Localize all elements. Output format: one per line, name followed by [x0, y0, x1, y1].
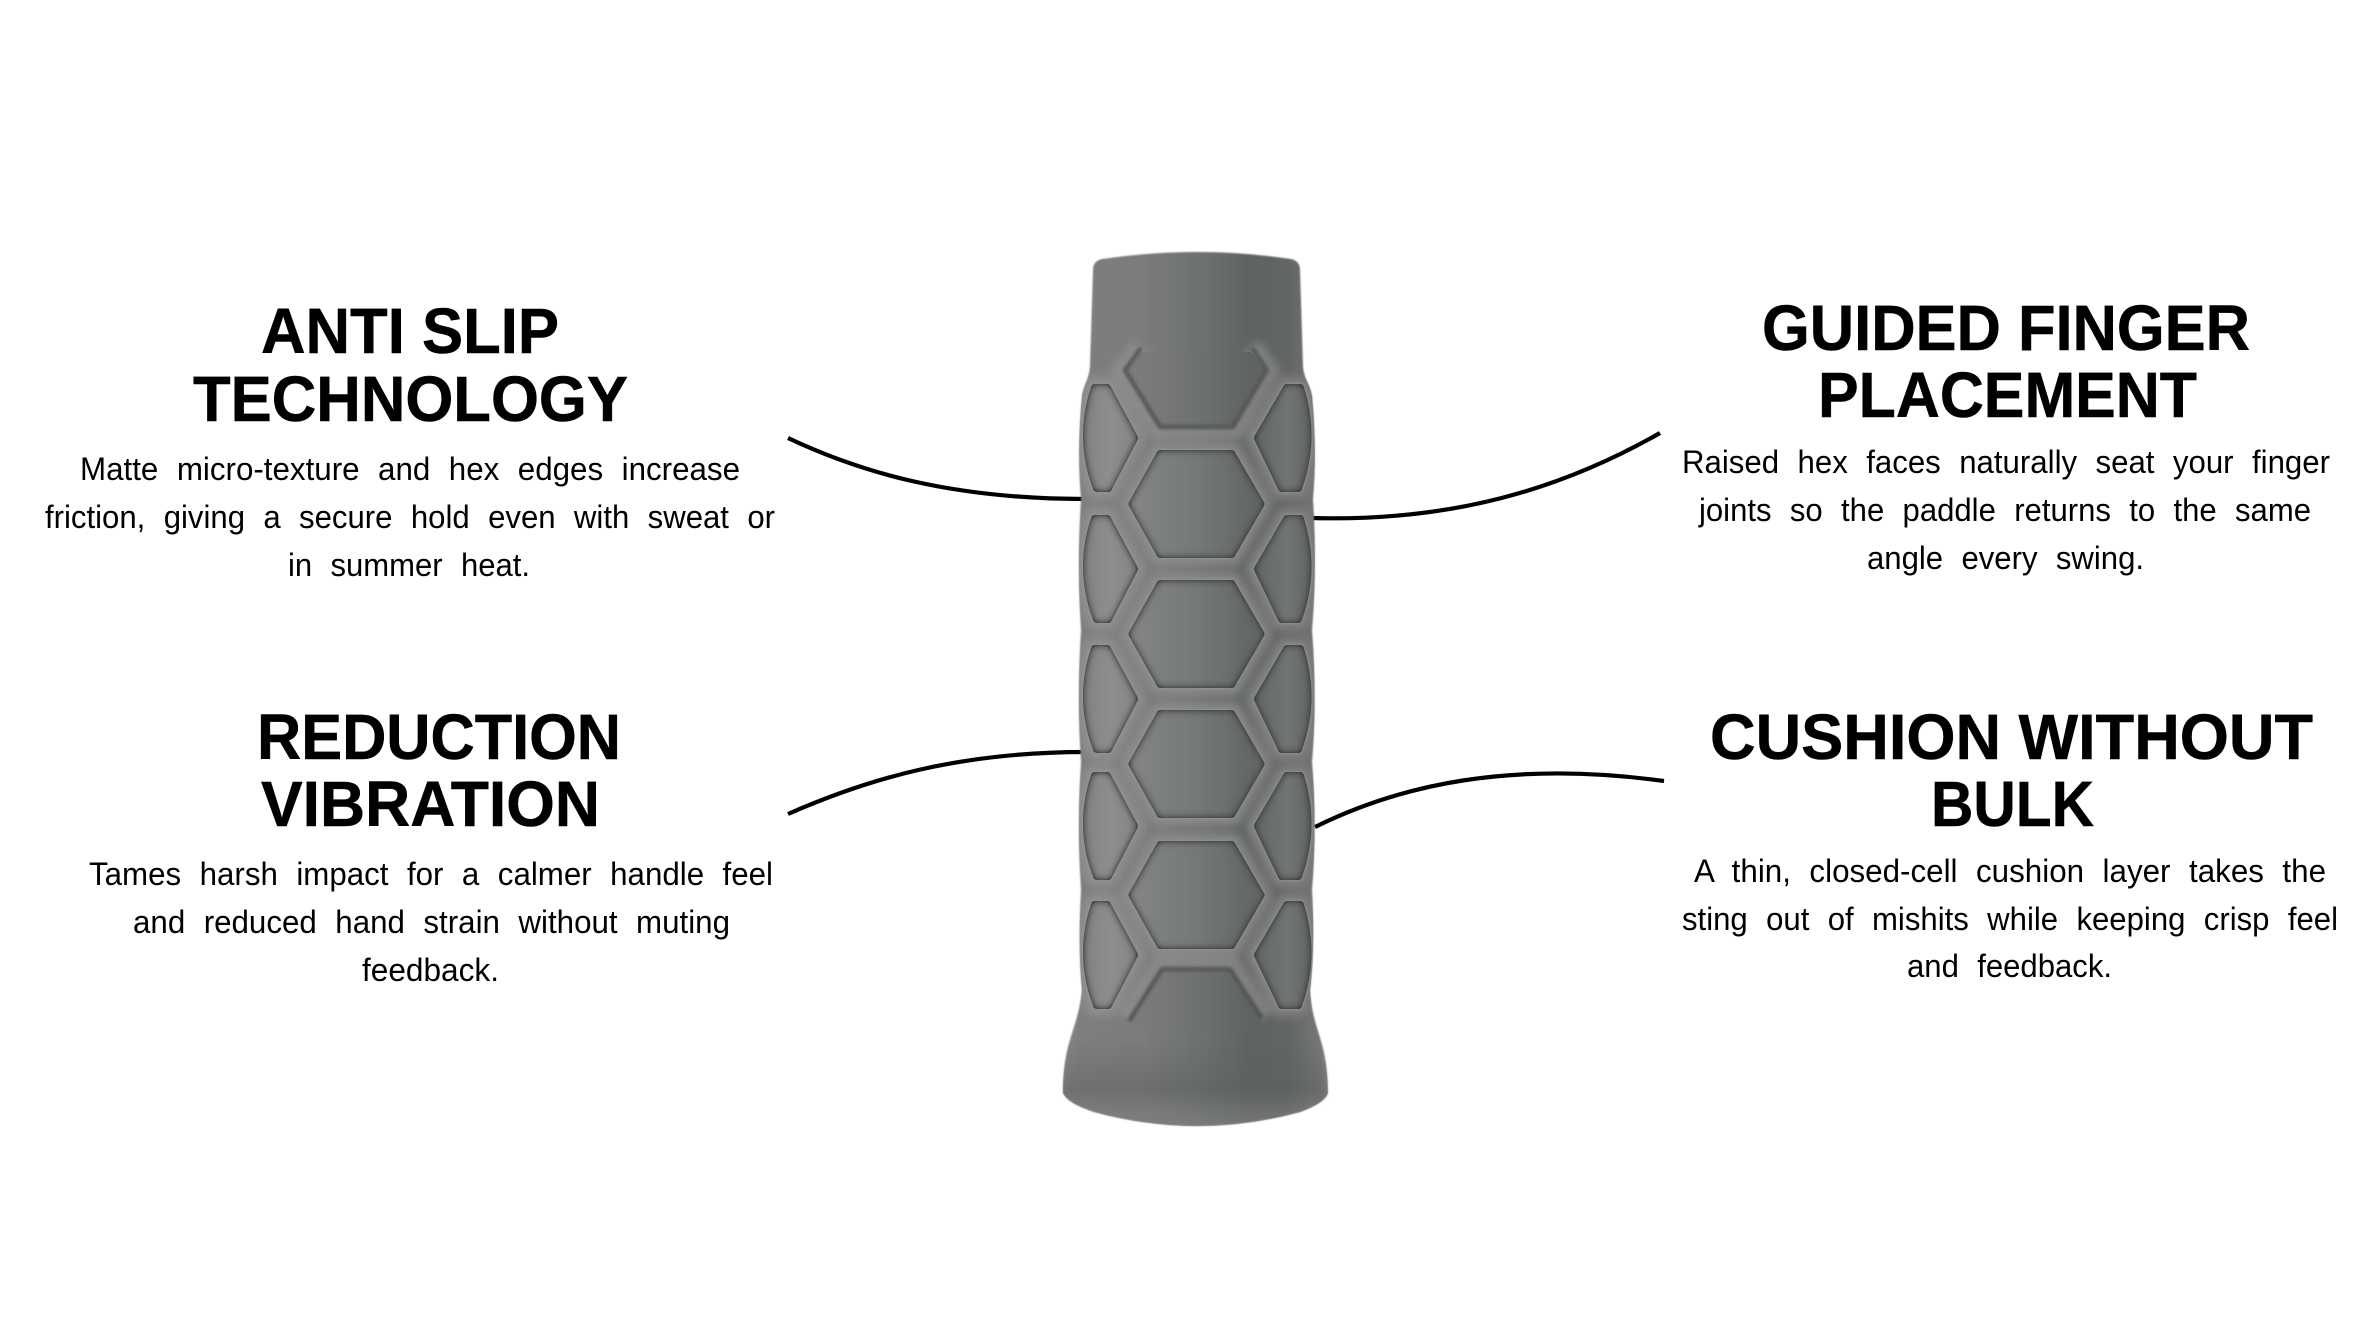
body copy: Tames harsh impact for a calmer handle feel	[89, 856, 773, 892]
heading: ANTI SLIP	[261, 295, 559, 367]
partial hexagon edges	[1125, 348, 1267, 1021]
body copy: Raised hex faces naturally seat your finger	[1682, 444, 2330, 480]
body copy: and reduced hand strain without muting	[133, 904, 730, 940]
raised rib lattice	[1087, 347, 1308, 1030]
right side cell 3	[1258, 649, 1308, 749]
hexagon 4	[1132, 845, 1260, 945]
hexagon 1	[1132, 454, 1260, 554]
body copy	[1682, 853, 2338, 984]
infographic canvas	[45, 251, 2336, 1127]
callout line: reduction vibration	[788, 752, 1086, 814]
right side cell 4	[1258, 776, 1308, 876]
recessed cells	[1087, 388, 1308, 1005]
partial hexagon top	[1126, 352, 1266, 426]
left side cell 5	[1087, 905, 1134, 1005]
text block: cushion without bulk	[1682, 701, 2338, 984]
hexagon 2	[1132, 584, 1260, 684]
heading	[1710, 701, 2313, 840]
handle grip illustration	[1060, 252, 1330, 1140]
heading: GUIDED FINGER	[1762, 292, 2250, 364]
heading	[1762, 292, 2250, 431]
base shading	[1063, 1052, 1328, 1126]
heading: TECHNOLOGY	[193, 363, 628, 435]
body copy: friction, giving a secure hold even with sweat or	[45, 499, 775, 535]
body copy: sting out of mishits while keeping crisp feel	[1682, 901, 2338, 937]
heading: PLACEMENT	[1818, 359, 2197, 431]
body copy	[45, 451, 775, 583]
body copy	[1682, 444, 2330, 576]
right side cell 5	[1258, 905, 1308, 1005]
body copy: Matte micro-texture and hex edges increase	[80, 451, 740, 487]
callout line: cushion without bulk	[1315, 773, 1664, 827]
body copy: feedback.	[362, 952, 499, 988]
left side cell 3	[1087, 649, 1134, 749]
heading: BULK	[1931, 768, 2094, 840]
text block: reduction vibration	[89, 701, 773, 988]
body copy: angle every swing.	[1867, 540, 2144, 576]
grip body silhouette	[1063, 252, 1328, 1126]
left side cell 1	[1087, 388, 1134, 488]
heading: CUSHION WITHOUT	[1710, 701, 2313, 773]
body copy	[89, 856, 773, 988]
text block: anti slip technology	[45, 295, 775, 583]
heading: VIBRATION	[261, 768, 600, 840]
hexagon 3	[1132, 714, 1260, 814]
body copy: joints so the paddle returns to the same	[1698, 492, 2311, 528]
left side cell 4	[1087, 776, 1134, 876]
body copy: in summer heat.	[288, 547, 530, 583]
partial hexagon bottom	[1132, 970, 1261, 1024]
right side cell 2	[1258, 519, 1308, 619]
heading	[193, 295, 628, 435]
body copy: and feedback.	[1907, 948, 2112, 984]
heading: REDUCTION	[257, 701, 621, 773]
heading	[257, 701, 621, 840]
callout line: anti slip	[788, 438, 1086, 499]
callout line: guided finger placement	[1311, 433, 1660, 518]
body copy: A thin, closed-cell cushion layer takes the	[1694, 853, 2326, 889]
right side cell 1	[1258, 388, 1308, 488]
left side cell 2	[1087, 519, 1134, 619]
text block: guided finger placement	[1682, 292, 2330, 576]
